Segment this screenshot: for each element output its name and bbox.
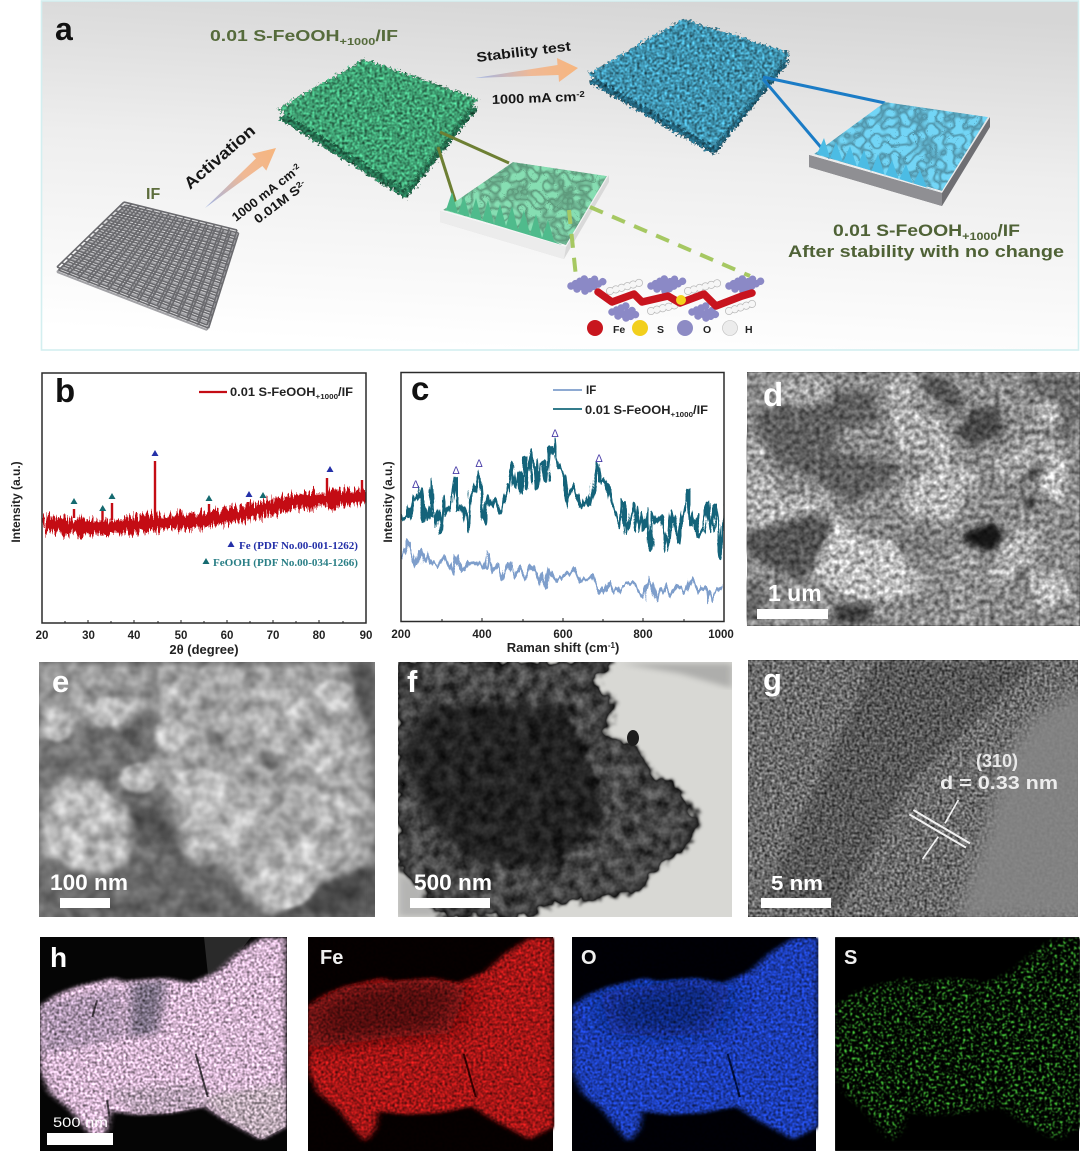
heading: green slab name: /IF <box>375 28 398 45</box>
connector: green zoom lines <box>438 132 509 213</box>
panel a background <box>42 1 1078 350</box>
panel O: element map <box>572 937 818 1151</box>
panel d: SEM image <box>747 372 1080 626</box>
TEM f dark mass <box>398 662 698 917</box>
legend text b: 0.01 S-FeOOH <box>230 385 310 399</box>
label c: c <box>411 370 429 407</box>
caption: after stability: +1000 <box>962 231 997 243</box>
label b: b <box>55 372 75 409</box>
legend line b <box>199 391 227 393</box>
legend: atoms: S <box>657 324 664 336</box>
text: sulfide concentration: 0.01M S <box>251 187 297 226</box>
x tick labels b: 80 <box>313 630 325 642</box>
lattice marker lines <box>909 800 970 859</box>
x tick labels b: 50 <box>175 630 187 642</box>
panel h: overlay map <box>40 937 287 1151</box>
TEM f background <box>398 662 732 917</box>
panel g: HRTEM image <box>748 660 1080 922</box>
annotation: plane: (310) <box>976 751 1018 771</box>
panel c: Raman chart <box>381 370 734 655</box>
text: Activation: Activation <box>181 122 259 193</box>
caption: after stability <box>788 221 1064 261</box>
legend: atoms <box>587 320 753 336</box>
Raman peak markers <box>412 428 603 491</box>
connector: blue zoom lines <box>763 77 885 158</box>
S map <box>835 937 1080 1151</box>
x tick labels c: 800 <box>633 629 653 641</box>
legend c <box>553 385 708 419</box>
SEM d texture <box>747 372 1080 626</box>
legend: atoms: O <box>703 324 711 336</box>
Fe map <box>308 937 554 1151</box>
panel f: TEM image <box>398 662 732 917</box>
x axis title c: ) <box>615 640 619 655</box>
x tick labels c <box>391 629 734 641</box>
HRTEM g amorphous edge <box>953 675 1080 922</box>
label S: S <box>844 947 857 969</box>
caption: after stability: After stability with no change <box>788 242 1064 261</box>
annotation: spacing: d = 0.33 nm <box>940 773 1058 793</box>
connector: dashed green zoom lines <box>569 207 750 277</box>
overlay sample <box>40 937 287 1151</box>
icon: blue inset slab <box>809 102 990 206</box>
legend: atoms: Fe <box>613 324 625 336</box>
panel Fe: element map <box>308 937 554 1151</box>
overlay streak <box>204 937 251 975</box>
x tick labels b: 60 <box>221 630 233 642</box>
Raman peak markers: Δ <box>412 479 420 491</box>
x tick labels b: 90 <box>360 630 372 642</box>
Raman trace: FeOOH <box>401 440 724 556</box>
legend c: 0.01 S-FeOOH <box>585 403 665 417</box>
overlay background <box>40 937 287 1151</box>
text: sulfide concentration: 2- <box>294 178 307 190</box>
heading: green slab name: 0.01 S-FeOOH <box>210 28 317 45</box>
scale text f: 500 nm <box>414 870 492 895</box>
text: activation current: -2 <box>289 161 301 173</box>
TEM f particle <box>627 730 639 746</box>
legend: atoms: H <box>745 324 753 336</box>
x tick labels c: 400 <box>472 629 492 641</box>
x ticks <box>65 620 343 623</box>
x tick labels b <box>36 630 372 642</box>
x tick labels c: 200 <box>391 629 411 641</box>
x tick labels c: 600 <box>553 629 573 641</box>
chart frame <box>42 373 366 623</box>
HRTEM g texture <box>748 660 1078 917</box>
x ticks c <box>442 618 684 622</box>
legend c: +1000 <box>671 410 693 419</box>
caption: after stability: 0.01 S-FeOOH <box>833 221 946 240</box>
scale bar h <box>47 1133 113 1145</box>
x tick labels c: 1000 <box>708 629 734 641</box>
scale text g: 5 nm <box>771 873 823 895</box>
panel a: synthesis schematic <box>42 1 1078 350</box>
icon: iron foam mesh <box>57 202 239 330</box>
Raman trace: IF <box>401 542 724 602</box>
legend text b: +1000 <box>316 392 338 401</box>
heading: green slab name: +1000 <box>340 36 376 48</box>
x tick labels b: 70 <box>267 630 279 642</box>
x tick labels b: 20 <box>36 630 48 642</box>
scale bar d <box>757 609 828 619</box>
panel b: XRD chart <box>9 372 372 657</box>
arrow: stability test <box>475 58 578 82</box>
label g: g <box>763 662 782 697</box>
scale text d: 1 um <box>768 580 822 606</box>
y axis title b: Intensity (a.u.) <box>9 461 23 543</box>
label h: h <box>50 942 67 973</box>
scale text h: 500 nm <box>53 1114 108 1130</box>
arrow: activation <box>205 148 276 208</box>
text: activation current: 1000 mA cm <box>229 169 295 224</box>
label e: e <box>52 664 69 699</box>
x axis title c: -1 <box>608 641 616 650</box>
legend c: IF <box>586 385 596 397</box>
Raman peak markers: Δ <box>452 465 460 477</box>
phase legend: FeOOH: FeOOH (PDF No.00-034-1266) <box>213 558 359 569</box>
label O: O <box>581 947 597 969</box>
text: stability current: 1000 mA cm <box>492 89 567 107</box>
x tick labels b: 30 <box>82 630 95 642</box>
text: stability current: -2 <box>576 89 585 99</box>
legend c: /IF <box>693 403 708 417</box>
label IF: IF <box>146 186 160 203</box>
XRD trace <box>44 461 366 528</box>
scale bar e <box>60 898 110 908</box>
x tick labels b: 40 <box>128 630 140 642</box>
label d: d <box>763 376 783 413</box>
x axis title b: 2θ (degree) <box>169 642 239 657</box>
icon: molecular structure <box>571 277 761 318</box>
Raman peak markers: Δ <box>475 458 483 470</box>
label a: a <box>55 11 73 47</box>
label Fe: Fe <box>320 947 343 969</box>
text: stability test: Stability test <box>476 38 572 65</box>
icon: blue slab after stability <box>588 19 790 155</box>
label f: f <box>407 664 418 699</box>
scale bar f <box>410 898 490 908</box>
scale text e: 100 nm <box>50 870 128 895</box>
XRD peak markers <box>70 450 334 511</box>
chart frame c <box>401 372 724 622</box>
panel S: element map <box>835 937 1080 1151</box>
caption: after stability: /IF <box>997 221 1020 240</box>
SEM e texture <box>39 662 375 917</box>
x axis title c: Raman shift (cm <box>507 640 608 655</box>
Raman peak markers: Δ <box>595 453 603 465</box>
legend text b: /IF <box>338 385 353 399</box>
scale bar g <box>761 898 831 908</box>
O map <box>572 937 818 1151</box>
Raman peak markers: Δ <box>551 428 559 440</box>
icon: green FeOOH slab <box>278 59 478 199</box>
y axis title c: Intensity (a.u.) <box>381 461 395 543</box>
panel e: SEM image <box>39 662 375 917</box>
phase legend: Fe: Fe (PDF No.00-001-1262) <box>239 541 359 552</box>
icon: green inset slab <box>440 162 609 259</box>
